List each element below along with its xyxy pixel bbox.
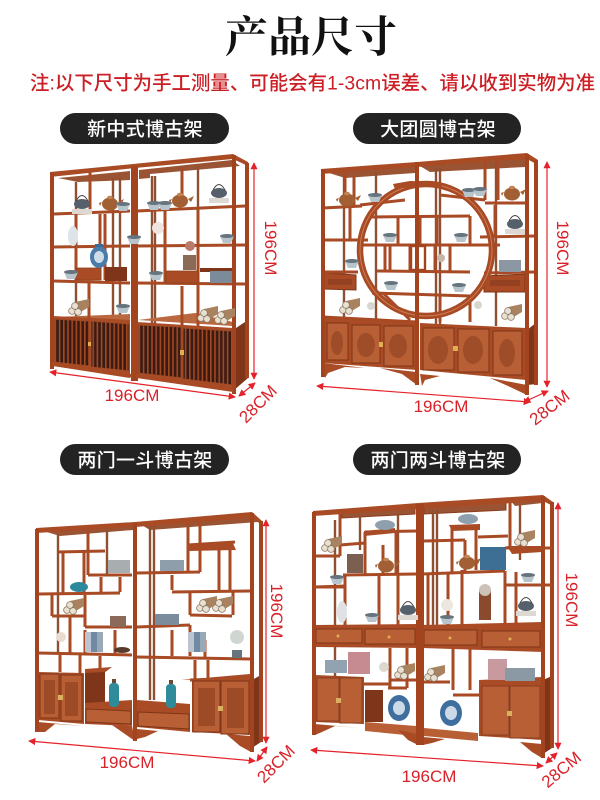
dimensions: shelf 1: 28CM	[235, 381, 281, 427]
shelf 1 back posts and top underside	[54, 160, 240, 328]
shelf 2 shelves and inner frames	[323, 160, 535, 322]
shelf 2 moon gate circle	[360, 181, 492, 316]
shelf 2 decorative objects	[336, 186, 526, 320]
dimensions: shelf 2: 196CM	[414, 397, 468, 416]
shelf 3 front posts and top board	[36, 512, 262, 752]
label pill: 两门一斗博古架: 两门一斗博古架	[77, 450, 213, 472]
dimensions: shelf 1	[50, 163, 281, 427]
shelf 4 shelves and inner frames	[315, 500, 542, 695]
shelf: 新中式博古架	[50, 154, 248, 394]
label pill: 两门一斗博古架	[60, 444, 229, 475]
dimensions: shelf 2: 196CM	[553, 221, 572, 275]
shelf 2 front posts and top board	[321, 153, 538, 395]
dimensions: shelf 2: 28CM	[526, 386, 573, 429]
label pill: 两门两斗博古架: 两门两斗博古架	[370, 450, 506, 472]
dimensions: shelf 4: 196CM	[562, 573, 581, 627]
shelf 4 front posts and top board	[313, 495, 553, 758]
shelf 2 drawers	[324, 273, 525, 292]
title: 产品尺寸	[225, 14, 397, 62]
label pill: 两门两斗博古架	[353, 444, 521, 475]
shelf 4 decorative objects	[322, 514, 536, 726]
dimensions: shelf 3: 196CM	[100, 753, 154, 772]
shelf 3 stepped shelves	[38, 520, 250, 680]
dimensions: shelf 3	[29, 520, 299, 787]
shelf 4 cabinets	[315, 675, 552, 758]
shelf: 大团圆博古架	[321, 153, 538, 395]
dimensions: shelf 3: 196CM	[267, 584, 286, 638]
shelf 4 drawers row	[314, 622, 543, 652]
shelf 1 shelves and inner frames	[54, 168, 245, 326]
shelf 4 carved top rails and back posts	[335, 497, 543, 680]
shelf 2 top underside and back posts	[326, 158, 525, 326]
label pill: 新中式博古架: 新中式博古架	[87, 118, 203, 140]
dimensions: shelf 4: 28CM	[538, 748, 585, 792]
dimensions: shelf 1: 196CM	[261, 221, 280, 275]
label pill: 大团圆博古架	[353, 113, 521, 144]
shelf: 两门一斗博古架	[36, 512, 262, 752]
label pill: 新中式博古架	[60, 113, 229, 144]
shelf: 两门两斗博古架	[313, 495, 553, 758]
shelf 3 cabinets and drawers	[38, 672, 261, 752]
dimensions: shelf 1: 196CM	[105, 386, 159, 405]
shelf 1 decorative objects	[64, 184, 235, 324]
shelf 1 front posts and top board	[50, 154, 248, 394]
dimensions: shelf 3: 28CM	[253, 741, 299, 787]
shelf 3 decorative objects	[56, 560, 244, 708]
label pill: 大团圆博古架: 大团圆博古架	[380, 118, 496, 140]
shelf 2 cabinet with carved doors	[323, 318, 537, 395]
dimensions: shelf 4: 196CM	[402, 767, 456, 786]
note: measurement tolerance: 注:以下尺寸为手工测量、可能会有1-3cm误差、请以收到实物为准	[30, 72, 595, 94]
dimensions: shelf 2	[317, 162, 573, 429]
dimensions: shelf 4	[311, 503, 585, 792]
shelf 3 top underside and back posts	[40, 515, 258, 700]
shelf 1 cabinet doors	[53, 316, 248, 392]
